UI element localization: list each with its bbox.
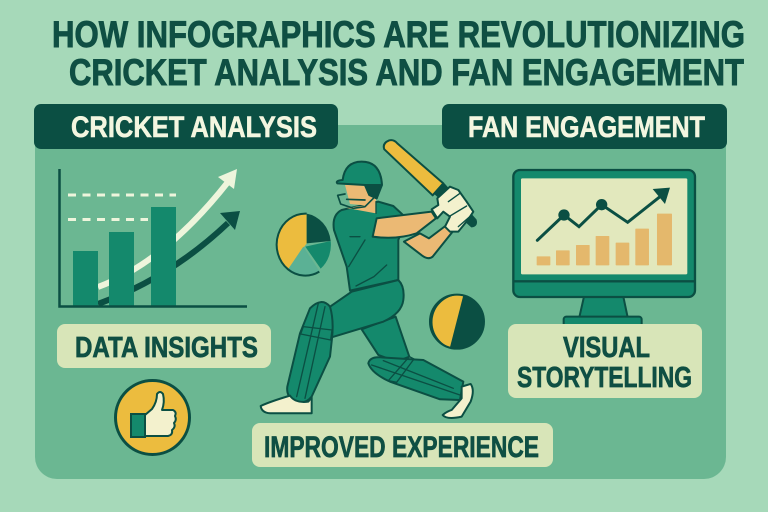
front arm (373, 212, 436, 238)
monitor body (513, 170, 695, 297)
label: improved experience (252, 423, 553, 467)
icon: monitor with chart (513, 170, 695, 327)
heading: cricket analysis: CRICKET ANALYSIS (71, 111, 317, 144)
face guard (338, 194, 375, 208)
back arm (404, 225, 453, 258)
label: visual storytelling: VISUAL (563, 332, 650, 364)
screen line arrow (537, 188, 670, 240)
front shoe (443, 384, 473, 418)
label: data insights: DATA INSIGHTS (75, 332, 258, 364)
helmet (337, 162, 382, 198)
bat (384, 140, 443, 195)
title (52, 14, 745, 93)
heading: fan engagement (442, 104, 727, 149)
front pad (368, 357, 463, 400)
label: improved experience: IMPROVED EXPERIENCE (264, 431, 539, 464)
neck and face (345, 185, 376, 213)
monitor stand (579, 297, 628, 317)
rear pad (287, 302, 333, 403)
heading: cricket analysis (34, 104, 338, 149)
label: data insights (57, 324, 271, 368)
label: visual storytelling (508, 324, 702, 398)
rear shoe (261, 396, 312, 413)
chart: data insights bars and arrows (60, 169, 247, 306)
heading: fan engagement: FAN ENGAGEMENT (468, 111, 705, 144)
screen bars (537, 214, 672, 265)
icon: thumbs up (116, 380, 190, 454)
panel: main background (35, 125, 726, 479)
torso (334, 202, 407, 291)
label: visual storytelling: STORYTELLING (517, 362, 692, 394)
pie chart: left (277, 214, 331, 276)
figure: cricket batsman (261, 140, 476, 418)
pie chart: right (430, 295, 484, 349)
gloves (432, 187, 473, 232)
thighs and shorts (362, 317, 409, 362)
